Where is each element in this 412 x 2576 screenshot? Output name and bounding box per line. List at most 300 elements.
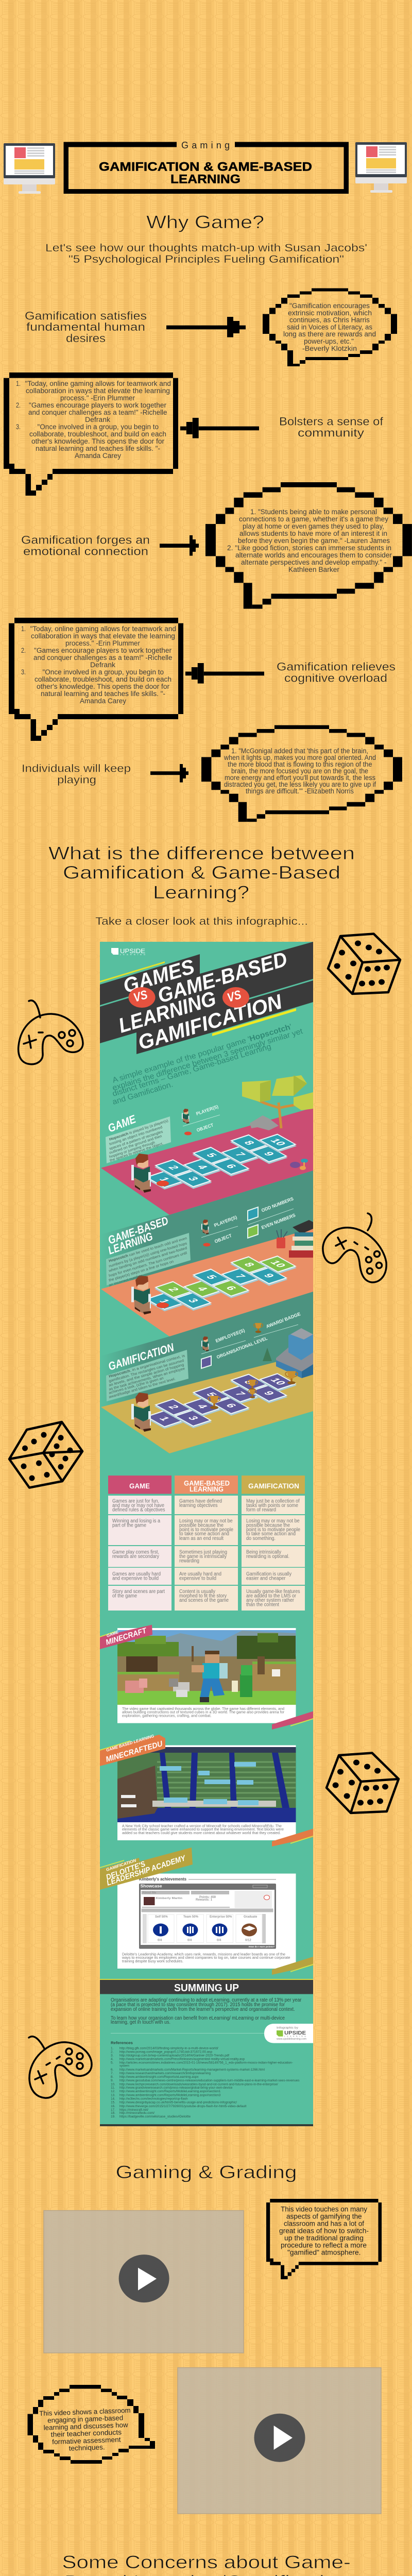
summing up text: To learn how your organisation can benefit from eLearning/ mLearning or multi-device <box>111 2015 285 2021</box>
references: http://www.marketsandmarkets.com/PressReleases/augmented-reality-virtual-reality.asp <box>119 2058 245 2061</box>
scene shadows <box>101 1171 313 1407</box>
table text: tasks with points or some <box>246 1503 298 1509</box>
speech bubble: video 2: engaging in game-based <box>47 2414 123 2425</box>
references: 17. <box>111 2108 115 2112</box>
speech bubble: principle 1 quote: continues, as Chris Harris <box>289 316 370 324</box>
hopscotch grid: 4 <box>194 1164 210 1170</box>
speech bubble: principle 2 quotes: 2. <box>16 401 21 409</box>
speech bubble: principle 4 quotes: other's knowledge. This opens the door for <box>37 683 170 690</box>
table headers: GAME <box>129 1482 150 1490</box>
speech bubble: video 1 <box>266 2199 382 2279</box>
table text: Game play comes first, <box>112 1550 159 1555</box>
comparison table <box>108 1476 305 1611</box>
references: https://badgeville.com/wiki/case_studies#Deloitte <box>119 2115 191 2119</box>
references: 15. <box>111 2101 115 2105</box>
summing up banner: SUMMING UP <box>174 1982 239 1994</box>
references: http://articles.economictimes.indiatimes.com/2015-01-16/news/58149756_1_edx-platform-moocs-indian-higher-education- <box>119 2061 293 2064</box>
hopscotch grid: 3 <box>185 1415 201 1421</box>
gamification description: as the task achievements. When an employee <box>108 1366 185 1392</box>
table text: learning objectives <box>179 1503 217 1509</box>
references: 8. <box>111 2075 114 2079</box>
gamification label: GAMIFICATION <box>107 1341 176 1373</box>
upside learning credit: www.upsidelearning.com <box>277 2038 306 2041</box>
table text: Being intrinsically <box>246 1550 281 1555</box>
speech bubble: principle 2 quotes: collaborate, troubleshoot, and build on each <box>29 430 166 438</box>
game legend <box>182 1104 220 1136</box>
table text: Games have defined <box>179 1498 222 1504</box>
speech bubble: video 2: techniques. <box>68 2443 105 2452</box>
speech bubble: principle 3 quotes: before they even begin the game." -Lauren James <box>238 537 390 545</box>
scene: game <box>101 1075 313 1215</box>
mushrooms <box>290 1159 308 1170</box>
speech bubble: video 1: This video touches on many <box>281 2205 367 2213</box>
speech bubble: principle 4 quotes: collaborate, troubleshoot, and build on each <box>35 675 171 683</box>
hopscotch grid: 7 <box>232 1273 248 1280</box>
summing up text: Organisations are adapting/ continuing to adopt eLearning, currently at a rate of 13% per year <box>111 1997 302 2003</box>
caption <box>122 1952 290 1963</box>
achievements heading: Kimberly's achievements <box>139 1876 186 1882</box>
game-based learning legend <box>201 1196 296 1247</box>
hopscotch grid: 1 <box>157 1298 172 1304</box>
speech bubble: principle 3 quotes <box>205 482 412 609</box>
table text: point is to motivate people <box>179 1527 233 1533</box>
hopscotch grid: 8 <box>241 1379 257 1385</box>
ribbon: deloitte: GAMIFICATION <box>106 1858 137 1872</box>
showcase screenshot: 0/4 <box>158 1939 162 1942</box>
speech bubble: principle 4 quotes: Defrank <box>90 661 115 669</box>
intro text: explains the difference between 3 seemingly similar yet <box>111 1027 304 1093</box>
icon: game controller right <box>323 1213 386 1282</box>
ribbon: minecraftedu <box>100 1734 313 1846</box>
speech bubble: video 1: classroom and has a lot of <box>284 2219 364 2228</box>
icon: left monitor <box>4 143 55 194</box>
speech bubble: principle 5 quote <box>201 725 402 822</box>
gamification legend <box>201 1311 301 1368</box>
speech bubble: principle 1 quote <box>263 289 397 366</box>
speech bubble: principle 5 quote: distracted you get, the less likely you are to give up if <box>224 781 376 788</box>
showcase screenshot: Team 50% <box>183 1916 199 1919</box>
principle 5 heading: playing <box>57 774 96 786</box>
title frame <box>64 140 349 194</box>
speech bubble: video 2 <box>28 2385 155 2464</box>
references: http://minecraftedu.com/ <box>119 2111 154 2115</box>
table text: Games are just for fun, <box>112 1498 159 1504</box>
game legend: OBJECT <box>196 1122 214 1133</box>
showcase screenshot: 0/4 <box>217 1939 221 1942</box>
speech bubble: principle 2 quotes: natural learning and teaches life skills. "- <box>36 445 160 452</box>
speech bubble: video 1: aspects of gamifying the <box>286 2212 362 2221</box>
table text: the game is intrinsically <box>179 1554 227 1560</box>
gamification legend: ORGANISATIONAL LEVEL <box>216 1335 268 1360</box>
table text: Sometimes just playing <box>179 1550 227 1555</box>
table text: than the content <box>246 1602 279 1607</box>
player and disc <box>131 1276 169 1315</box>
table text: Content is usually <box>179 1589 215 1595</box>
references: system <box>119 2064 129 2068</box>
speech bubble: principle 4 quotes: 2. <box>21 647 26 654</box>
hopscotch grid: 10 <box>267 1138 288 1147</box>
subtitle: "5 Psychological Principles Fueling Gamification" <box>68 253 344 265</box>
logo: upside learning: UPSIDE <box>120 947 145 955</box>
references: http://w3techs.com/technologies/report/cp-flash <box>119 2097 188 2100</box>
speech bubble: principle 4 quotes <box>9 618 183 741</box>
caption: The video game that captivated thousands across the globe. The game has different elements, and <box>122 1706 284 1711</box>
gamification description: achieves a task, (s)he is given an <box>108 1376 164 1395</box>
hopscotch grid: 1 <box>157 1416 172 1422</box>
caption: A New York City school teacher crafted a version of Minecraft for schools called MinecraftEdu. The <box>122 1823 282 1828</box>
arrow: principle 2 <box>180 418 259 438</box>
game description: tossing an object into numbered <box>109 1125 163 1146</box>
game label: GAME <box>106 1112 138 1135</box>
upside learning credit <box>111 2024 313 2043</box>
game-based learning legend: ODD NUMBERS <box>261 1196 294 1213</box>
references: 13. <box>111 2093 115 2097</box>
ribbon: deloitte: LEADERSHIP ACADEMY <box>106 1854 187 1888</box>
speech bubble: principle 2 quotes: 1. <box>16 380 21 387</box>
speech bubble: principle 2 quotes: "Games encourage players to work together <box>29 401 167 409</box>
hopscotch grid: 8 <box>241 1140 257 1146</box>
gamification description <box>106 1350 188 1401</box>
caption: ways to encourage its employees and client companies to log on, take courses and continue corporate <box>122 1955 290 1960</box>
table text: any other system rather <box>246 1598 295 1603</box>
arrow: principle 5 <box>150 764 188 783</box>
game description: spaces of a pattern of rectangles <box>109 1129 164 1151</box>
speech bubble: principle 4 quotes: collaboration in ways that elevate the learning <box>31 632 175 640</box>
game-based learning legend: OBJECT <box>214 1233 233 1244</box>
principle 2 heading: community <box>298 427 364 439</box>
icon: right monitor <box>355 142 407 193</box>
table text: and may or may not have <box>112 1503 164 1509</box>
heading: gaming and grading: Gaming & Grading <box>115 2162 297 2182</box>
hopscotch grid: 5 <box>203 1392 219 1398</box>
table text: May just be a collection of <box>246 1498 300 1504</box>
references: http://www.gessdubai.com/news-centre/press-releases/education-suppliers-turn-middle-east-e-learning-market-sees-revenues <box>119 2079 300 2082</box>
summing up text: (a pace that is projected to stay consistent through 2017). 2015 holds the promise for <box>111 2002 285 2008</box>
game-based learning description <box>106 1233 191 1287</box>
table text: are added to the LMS or <box>246 1593 297 1599</box>
table text: expensive to build <box>179 1575 216 1582</box>
table headers: GAME-BASED <box>184 1479 230 1487</box>
title frame: LEARNING <box>170 172 241 187</box>
principle 3 heading: Gamification forges an <box>21 534 150 547</box>
speech bubble: video 2: their teacher conducts <box>50 2428 122 2438</box>
hopscotch grid: 10 <box>267 1377 288 1386</box>
principle 1 heading: fundamental human <box>26 320 145 333</box>
principle 1 heading <box>25 309 147 345</box>
references: http://www.theverge.com/2015/1/27/7926001/youtube-drops-flash-for-html5-video-default <box>119 2105 247 2108</box>
summing up banner <box>100 1979 313 1994</box>
table text: do something. <box>246 1536 276 1541</box>
references: http://www.ambientinsight.com/Reports/MobileLearning.aspx#section1 <box>119 2090 221 2093</box>
references: http://www.marketsandmarkets.com/Market-Reports/learning-management-systems-market-1266.html <box>119 2068 265 2072</box>
game-based learning description: when landing on odd numbers and two-footed <box>108 1245 187 1273</box>
hopscotch grid: 3 <box>185 1176 201 1182</box>
speech bubble: principle 2 quotes: Defrank <box>85 416 110 423</box>
icon: dice top right <box>328 934 400 994</box>
upside learning credit: Infographic by <box>277 2027 298 2030</box>
ribbon: minecraft <box>100 1625 313 1730</box>
table text: form of reward <box>246 1507 276 1513</box>
hopscotch grid: 2 <box>165 1286 181 1293</box>
panel: minecraft <box>117 1628 296 1723</box>
showcase screenshot: Enterprise 50% <box>210 1916 232 1919</box>
title band: GAMES <box>121 955 197 998</box>
game description <box>106 1116 171 1163</box>
books and cap <box>289 1220 313 1258</box>
references: 10. <box>111 2082 115 2086</box>
references: http://blog.gfk.com/2014/03/finding-simplicity-in-a-multi-device-world/ <box>119 2047 218 2050</box>
hopscotch grid <box>145 1256 297 1311</box>
player <box>131 1393 151 1432</box>
player and disc <box>131 1154 169 1193</box>
speech bubble: principle 1 quote: long as there are rewards and <box>283 330 376 338</box>
game-based learning legend: PLAYER(S) <box>213 1214 238 1228</box>
hopscotch grid: 7 <box>232 1151 248 1158</box>
game description: the spaces to retrieve the object. <box>109 1141 164 1163</box>
table text: point is to motivate people <box>246 1527 300 1533</box>
gamification description: gamification. The rectangles can be assumed <box>108 1358 184 1383</box>
title frame: Gaming <box>181 140 230 150</box>
subtitle <box>45 242 367 265</box>
references: http://www.designbyacap.co.uk/html5-benefits-usage-and-predictions-infographic/ <box>119 2101 237 2105</box>
gamification description: award/badge and taken to the next level. <box>108 1376 176 1399</box>
speech bubble: video 1: up the traditional grading <box>284 2234 364 2242</box>
table cells middle and right <box>175 1496 305 1611</box>
heading: why game: Why Game? <box>146 212 264 232</box>
upside learning credit: LEARNING <box>284 2035 306 2037</box>
references: 2. <box>111 2050 114 2054</box>
speech bubble: principle 2 quotes: and conquer challenges as a team!" -Richelle <box>28 409 167 416</box>
heading: difference: Learning? <box>153 883 249 903</box>
principle 2 heading: Bolsters a sense of <box>279 415 384 428</box>
image: minecraftedu scene <box>117 1747 296 1822</box>
caption: elements of the classic game were enhanced to support the learning environment. Text blocks were <box>122 1827 284 1832</box>
hopscotch grid: 6 <box>223 1285 238 1291</box>
speech bubble: principle 1 quote: "Gamification encourages <box>289 302 370 310</box>
speech bubble: principle 2 quotes: process." -Erin Plummer <box>60 394 135 402</box>
image: minecraft scene <box>117 1630 296 1705</box>
game-based learning legend: EVEN NUMBERS <box>261 1212 296 1230</box>
showcase screenshot: 0/4 <box>187 1939 192 1942</box>
references: http://dotgroup.com.br/wp-content/uploads/2014/04/Gartner-2020-Trends.pdf <box>119 2054 229 2058</box>
principle 2 heading <box>279 415 384 439</box>
game description: hopping or jumping through <box>109 1140 156 1159</box>
game-based learning description: an incorrect number. <box>108 1273 144 1287</box>
gamification description: Hopscotch , in a organisational context, is <box>108 1353 185 1379</box>
title band: GAME-BASED <box>155 948 290 1008</box>
references: https://minecraft.net/ <box>119 2108 148 2112</box>
table headers: GAMIFICATION <box>248 1482 299 1490</box>
summing up text <box>111 1997 302 2025</box>
hopscotch grid: 3 <box>185 1297 201 1304</box>
references: http://www.ambientinsight.com/Reports/eLearning.aspx <box>119 2075 199 2079</box>
showcase screenshot: Kimberly Martin <box>156 1897 183 1900</box>
heading: difference: What is the difference between <box>48 843 355 863</box>
table text: rewarding is optional. <box>246 1554 289 1560</box>
table text: to take some action and <box>179 1531 229 1537</box>
scene: gamification <box>101 1311 313 1453</box>
table text: and expensive to build <box>112 1575 159 1582</box>
speech bubble: principle 2 quotes: "Today, online gaming allows for teamwork and <box>25 380 171 387</box>
speech bubble: principle 4 quotes: 3. <box>21 668 26 676</box>
speech bubble: principle 1 quote: extrinsic motivation, which <box>288 309 372 317</box>
speech bubble: video 1: procedure to reflect a more <box>281 2241 367 2249</box>
references <box>111 2040 300 2119</box>
hopscotch grid: 2 <box>165 1164 181 1171</box>
table text: defined rules & objectives <box>112 1507 165 1513</box>
references: 3. <box>111 2054 114 2058</box>
principle 4 heading: Gamification relieves <box>277 660 396 673</box>
speech bubble: principle 3 quotes: allows students to have more of an interest it in <box>239 530 387 537</box>
game-based learning label: LEARNING <box>106 1230 154 1257</box>
speech bubble: principle 4 quotes: "Today, online gaming allows for teamwork and <box>30 625 176 633</box>
hopscotch grid: 9 <box>261 1151 277 1157</box>
speech bubble: principle 2 quotes: "Once involved in a group, you begin to <box>37 423 159 431</box>
table text: rewarding <box>179 1558 199 1564</box>
table text: easier and cheaper <box>246 1575 286 1582</box>
arrow: principle 4 <box>185 663 264 684</box>
table text: part of the game <box>112 1522 146 1528</box>
hopscotch grid: 10 <box>267 1260 288 1268</box>
hopscotch grid: 6 <box>223 1163 238 1170</box>
speech bubble: principle 4 quotes: "Once involved in a group, you begin to <box>42 668 164 676</box>
icon: dice left <box>9 1422 82 1488</box>
building <box>276 1328 313 1378</box>
principle 5 heading <box>22 763 131 786</box>
title band: VS <box>132 988 149 1005</box>
logo: upside learning: LEARNING <box>120 953 145 956</box>
speech bubble: principle 3 quotes: alternate worlds and encourages them to consider <box>235 551 392 559</box>
caption: training despite busy work schedules. <box>122 1959 183 1963</box>
references: 16. <box>111 2105 115 2108</box>
showcase screenshot: Rewards: 1 <box>196 1899 213 1902</box>
title band <box>100 942 313 1055</box>
speech bubble: principle 4 quotes: natural learning and teaches life skills. "- <box>41 690 165 698</box>
principle 5 heading: Individuals will keep <box>22 763 131 775</box>
table text: possible because the <box>179 1522 224 1528</box>
speech bubble: principle 4 quotes: and conquer challenges as a team!" -Richelle <box>33 654 172 662</box>
summing up text: expansion of online training both from the learner's perspective and organisational context. <box>111 2007 295 2012</box>
speech bubble: principle 4 quotes: 1. <box>21 625 26 633</box>
caption: exploration, gathering resources, crafting, and combat. <box>122 1714 212 1718</box>
speech bubble: principle 2 quotes: Amanda Carey <box>75 452 121 460</box>
icon: dice right lower <box>327 1753 399 1813</box>
speech bubble: video 2: learning and discusses how <box>43 2421 128 2432</box>
title band: VS <box>226 988 243 1005</box>
scene: game-based learning <box>101 1196 313 1336</box>
arrow: principle 3 <box>160 535 199 556</box>
showcase screenshot: Points: 459 <box>199 1896 216 1899</box>
speech bubble: principle 5 quote: 1. "McGonigal added that 'this part of the brain, <box>231 747 368 755</box>
speech bubble: principle 3 quotes: connections to a game, whether it's a game they <box>239 515 388 523</box>
hopscotch grid: 5 <box>203 1274 219 1280</box>
references: 11. <box>111 2086 115 2090</box>
speech bubble: video 2: This video shows a classroom <box>39 2406 131 2417</box>
logo: upside learning <box>111 947 145 956</box>
showcase screenshot: Showcase <box>140 1884 162 1888</box>
references: http://www.pcmag.com/image_popup/0,1740,iid=371672,00.asp <box>119 2050 212 2054</box>
references: http://www.researchandmarkets.com/research/3m6spn/elearning <box>119 2072 211 2075</box>
embedded infographic panel <box>100 942 313 2126</box>
speech bubble: principle 5 quote: brain, the more focused you are on the goal, the <box>231 767 368 775</box>
table text: Losing may or may not be <box>179 1518 233 1524</box>
panel: deloitte <box>117 1874 296 1969</box>
hopscotch grid: 7 <box>232 1391 248 1397</box>
ribbon: deloitte <box>100 1848 313 1975</box>
speech bubble: principle 5 quote: the more blood that is flowing to this region of the <box>228 760 372 768</box>
table cells <box>108 1496 171 1611</box>
table text: rewards are secondary <box>112 1554 159 1560</box>
ribbon: minecraft: MINECRAFT <box>105 1626 148 1647</box>
showcase screenshot: Graduate <box>244 1916 258 1919</box>
hopscotch grid <box>145 1133 297 1190</box>
heading: concerns: Some Concerns about Game- <box>62 2552 351 2572</box>
table text: and scenes of the game <box>179 1598 229 1603</box>
ribbon: minecraftedu: MINECRAFTEDU <box>105 1739 164 1764</box>
small tree <box>263 1348 272 1361</box>
speech bubble: principle 3 quotes: 2. "Like good fiction, stories can immerse students in <box>227 544 391 552</box>
references: 1. <box>111 2047 114 2050</box>
game-based learning description: the player(s) steps on a line or hops on <box>108 1259 174 1282</box>
speech bubble: video 1: "gamified" atmosphere. <box>287 2248 360 2257</box>
speech bubble: principle 2 quotes: collaboration in ways that elevate the learning <box>26 387 170 395</box>
principle 3 heading: emotional connection <box>23 545 148 557</box>
showcase screenshot: 0/12 <box>245 1939 251 1942</box>
references: 5. <box>111 2061 114 2064</box>
principle 1 heading: Gamification satisfies <box>25 309 147 322</box>
references: 4. <box>111 2058 114 2061</box>
table text: Losing may or may not be <box>246 1518 300 1524</box>
tree <box>242 1075 313 1128</box>
showcase screenshot <box>139 1884 276 1949</box>
speech bubble: principle 3 quotes: alternate perspectives and develop empathy." - <box>241 558 386 566</box>
references: 14. <box>111 2097 115 2100</box>
speech bubble: principle 1 quote: -Beverly Klotzkin <box>302 345 357 352</box>
speech bubble: principle 4 quotes: process." -Erin Plummer <box>65 639 140 647</box>
table text: Story and scenes are part <box>112 1589 165 1595</box>
game description: outlined on the ground and then <box>109 1133 162 1155</box>
speech bubble: principle 1 quote: said in Voices of Literacy, as <box>287 324 372 331</box>
table text <box>112 1498 300 1607</box>
subtitle: Let's see how our thoughts match-up with Susan Jacobs' <box>45 242 367 254</box>
references: 18. <box>111 2111 115 2115</box>
title frame: GAMIFICATION & GAME-BASED <box>99 160 312 174</box>
title band: LEARNING <box>116 987 219 1038</box>
heading: difference: Gamification & Game-Based <box>63 862 340 883</box>
hopscotch grid: 2 <box>165 1404 181 1410</box>
showcase screenshot: Self 50% <box>155 1916 168 1919</box>
table headers <box>108 1476 305 1494</box>
intro text: and Gamification. <box>111 1080 174 1107</box>
hopscotch grid <box>145 1373 297 1429</box>
upside learning credit: UPSIDE <box>284 2030 306 2036</box>
table text: morphed to fit the story <box>179 1593 227 1599</box>
references: 7. <box>111 2072 114 2075</box>
table text: Are usually hard and <box>179 1571 221 1577</box>
caption: Deloitte's Leadership Academy, which uses rank, rewards, missions and leader boards as one of the <box>122 1952 285 1957</box>
game-based learning description: Hopscotch can be used to teach odd and even <box>108 1235 187 1263</box>
game-based learning label: GAME-BASED <box>106 1214 170 1247</box>
speech bubble: principle 3 quotes: play at home or even games they used to play, <box>243 522 384 530</box>
principle 3 heading <box>21 534 150 557</box>
caption: added so that teachers could give students more context about whatever world that they created. <box>122 1831 281 1835</box>
game-based learning description: hops for even numbers. The turn continues until <box>108 1250 187 1278</box>
gamification legend: EMPLOYEE(S) <box>215 1328 246 1344</box>
hopscotch grid: 8 <box>241 1262 257 1268</box>
gamification legend: AWARD/ BADGE <box>265 1311 301 1329</box>
video placeholder 1 <box>44 2211 244 2353</box>
pencil cup <box>277 1229 287 1248</box>
